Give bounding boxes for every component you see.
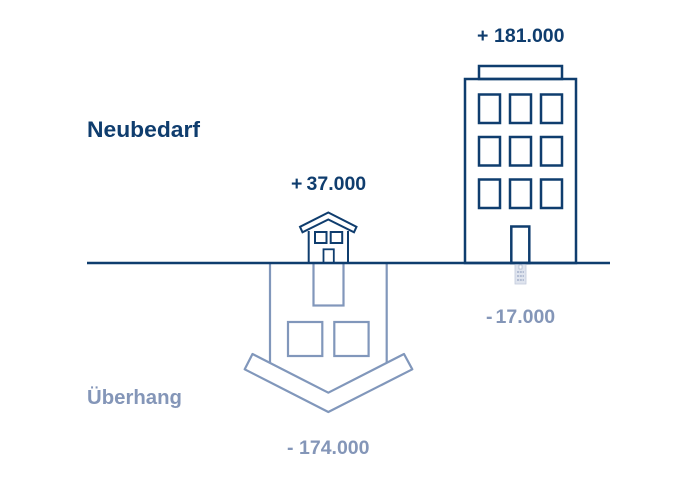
icon: tiny underground building surplus <box>515 264 526 284</box>
icon: apartment building new demand <box>465 66 576 263</box>
ground line <box>87 262 610 264</box>
value: -17.000: 17.000 <box>496 306 555 328</box>
value: +181.000: + <box>477 25 488 47</box>
value: -174.000: - <box>287 437 294 459</box>
value: +37.000: 37.000 <box>306 173 366 195</box>
value: -17.000: - <box>486 306 492 328</box>
value: -174.000: 174.000 <box>299 437 370 459</box>
heading: Überhang: Überhang <box>87 386 182 409</box>
icon: small house new demand <box>300 212 356 263</box>
heading: Neubedarf: Neubedarf <box>87 117 201 142</box>
value: +37.000: + <box>291 173 302 195</box>
value: +181.000: 181.000 <box>494 25 565 47</box>
icon: underground house surplus <box>245 263 412 412</box>
